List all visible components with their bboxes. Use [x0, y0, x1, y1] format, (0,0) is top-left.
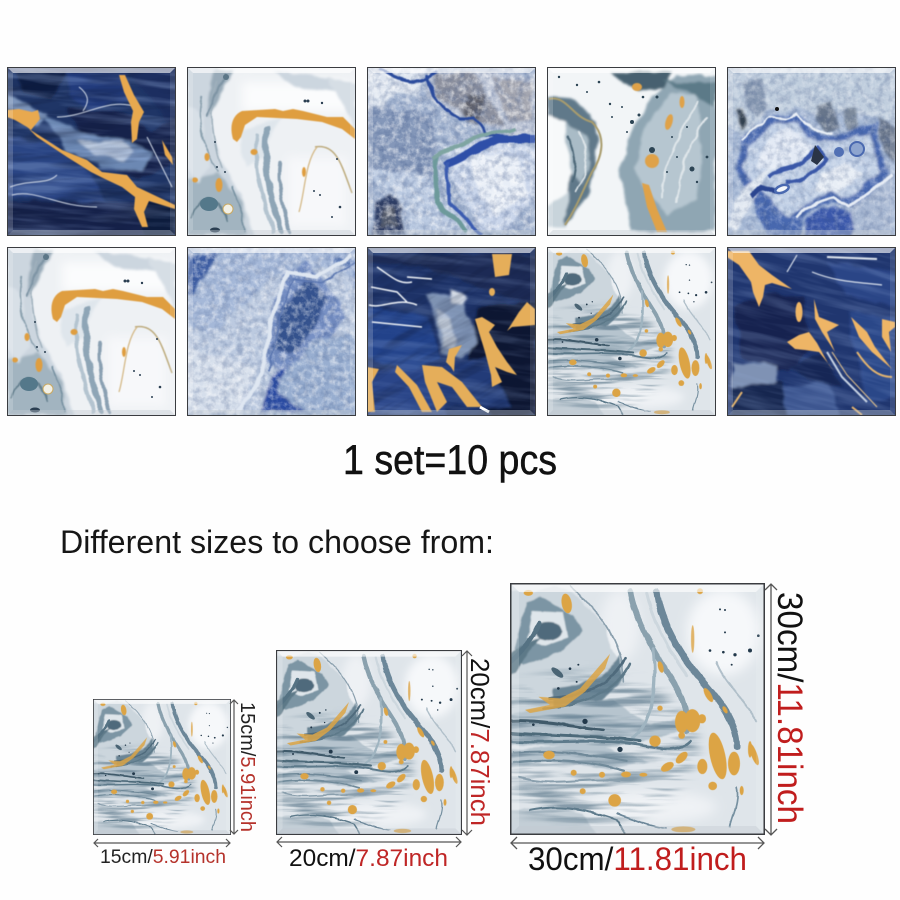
size option: 15cm: [93, 699, 258, 868]
tile 7: blue watercolor agate: [187, 247, 358, 416]
tile 3: blue and green agate: [367, 67, 536, 236]
tile 5: pale blue agate rings: [727, 67, 896, 236]
tile: 30cm sample: [510, 583, 765, 835]
tile 6: white marble with gold arc: [7, 247, 176, 416]
size option: 20cm: [276, 650, 495, 872]
label: 20cm width: 20cm/7.87inch: [289, 845, 448, 872]
tile 8: navy with gold veins: [295, 175, 609, 489]
arrow: 20cm height: [462, 651, 472, 835]
label: 30cm width: 30cm/11.81inch: [528, 841, 747, 877]
label: 15cm width: 15cm/5.91inch: [100, 847, 226, 868]
label: 30cm height: 30cm/11.81inch: [770, 592, 809, 824]
tile: 20cm sample: [276, 650, 462, 835]
tile 9: grey swirl marble with gold drops: [547, 247, 716, 416]
arrow: 30cm width: [511, 837, 764, 849]
label: 20cm height: 20cm/ 7.87inch: [465, 658, 495, 826]
heading: set quantity: 1 set=10 pcs: [343, 436, 557, 483]
arrow: 20cm width: [277, 837, 461, 847]
tile grid: 10 pieces: [0, 49, 900, 489]
tile: 15cm sample: [93, 699, 231, 835]
label: 15cm height: 15cm/ 5.91inch: [236, 702, 258, 832]
tile 4: white and slate splatter: [547, 67, 716, 236]
tile 2: white marble with gold arc: [187, 67, 356, 236]
size option: 30cm: [510, 583, 809, 877]
arrow: 15cm height: [230, 700, 238, 834]
tile 1: navy and gold marble: [0, 49, 195, 255]
tile 10: deep blue with gold: [685, 205, 900, 459]
subheading: size options: Different sizes to choose from:: [60, 524, 494, 560]
arrow: 30cm height: [765, 584, 777, 835]
arrow: 15cm width: [94, 839, 230, 847]
